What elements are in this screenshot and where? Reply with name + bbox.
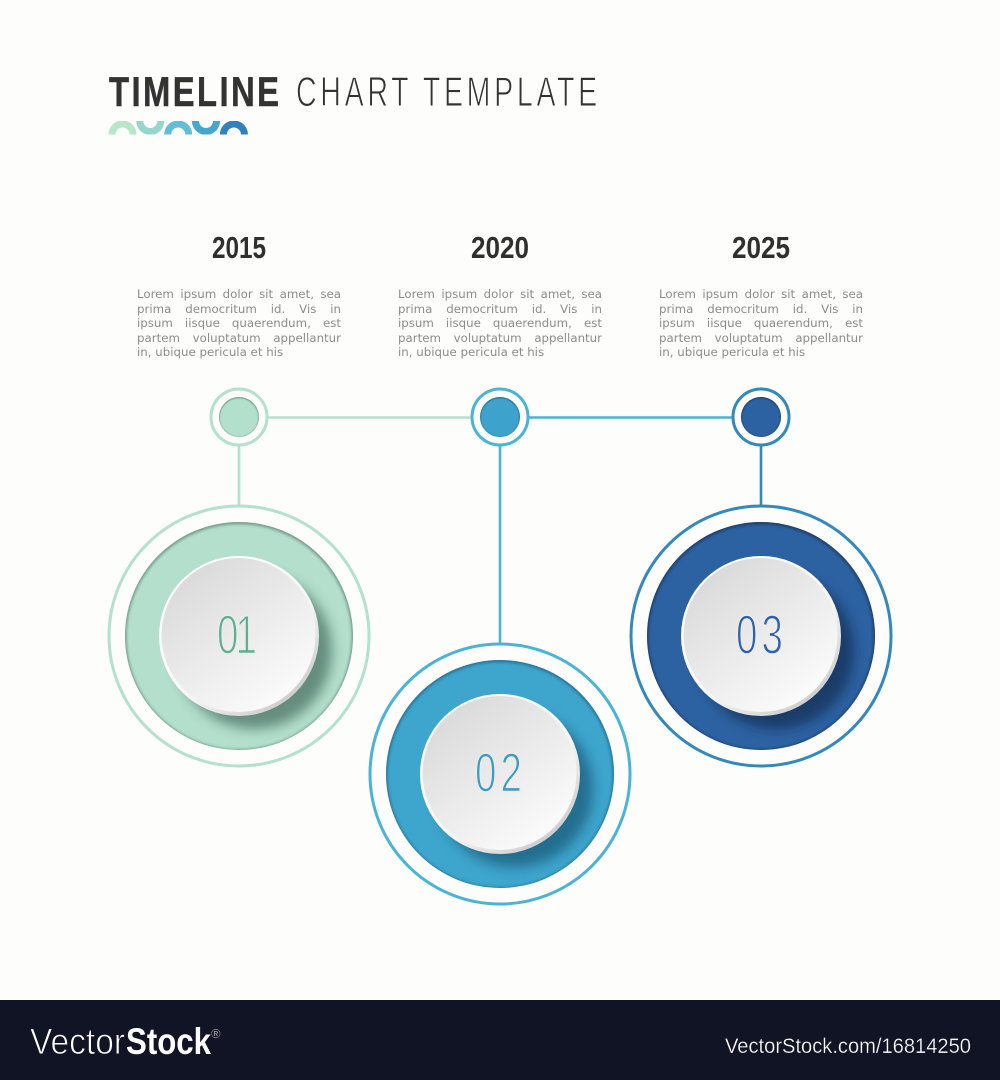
- text block: 2020: prima democritum id. Vis in: [398, 302, 602, 316]
- node: 2015: [211, 389, 267, 445]
- footer band: [0, 1000, 1000, 1080]
- text block: 2025: prima democritum id. Vis in: [659, 302, 863, 316]
- year labels: 2025: [732, 230, 790, 265]
- badge 03: 03: [736, 605, 783, 666]
- decorative wave under title: [112, 121, 244, 134]
- text block: 2020: ipsum iisque quaerendum, est: [398, 316, 602, 330]
- year labels: 2020: [471, 230, 529, 265]
- node: 2025: [733, 389, 789, 445]
- badge 02: 02: [475, 743, 522, 804]
- text block: 2015: ipsum iisque quaerendum, est: [137, 316, 341, 330]
- text block: 2020: partem voluptatum appellantur: [398, 331, 602, 345]
- text block: 2020: Lorem ipsum dolor sit amet, sea: [398, 287, 602, 301]
- title: TIMELINE: [109, 68, 279, 115]
- text block: 2015: prima democritum id. Vis in: [137, 302, 341, 316]
- badge 03: [631, 506, 891, 766]
- title: [109, 67, 597, 115]
- timeline connectors: [239, 418, 761, 644]
- year labels: 2015: [212, 230, 266, 265]
- badge 02: [370, 644, 630, 904]
- text block: 2025: in, ubique pericula et his: [659, 345, 805, 359]
- text block: 2015: Lorem ipsum dolor sit amet, sea: [137, 287, 341, 301]
- text block: 2025: ipsum iisque quaerendum, est: [659, 316, 863, 330]
- text block: 2025: [659, 287, 863, 359]
- text block: 2015: partem voluptatum appellantur: [137, 331, 341, 345]
- footer band: Vector: [30, 1021, 125, 1062]
- footer band: VectorStock.com/16814250: [725, 1034, 971, 1058]
- text block: 2015: [137, 287, 341, 359]
- year labels: [212, 230, 790, 265]
- text block: 2015: in, ubique pericula et his: [137, 345, 283, 359]
- text block: 2020: in, ubique pericula et his: [398, 345, 544, 359]
- footer band: Stock: [126, 1021, 211, 1062]
- footer band: ®: [211, 1026, 221, 1041]
- text block: 2025: Lorem ipsum dolor sit amet, sea: [659, 287, 863, 301]
- text block: 2025: partem voluptatum appellantur: [659, 331, 863, 345]
- title: CHART TEMPLATE: [296, 67, 597, 115]
- node: 2020: [472, 389, 528, 445]
- text block: 2020: [398, 287, 602, 359]
- badge 01: [109, 506, 369, 766]
- badge 01: 01: [217, 605, 257, 666]
